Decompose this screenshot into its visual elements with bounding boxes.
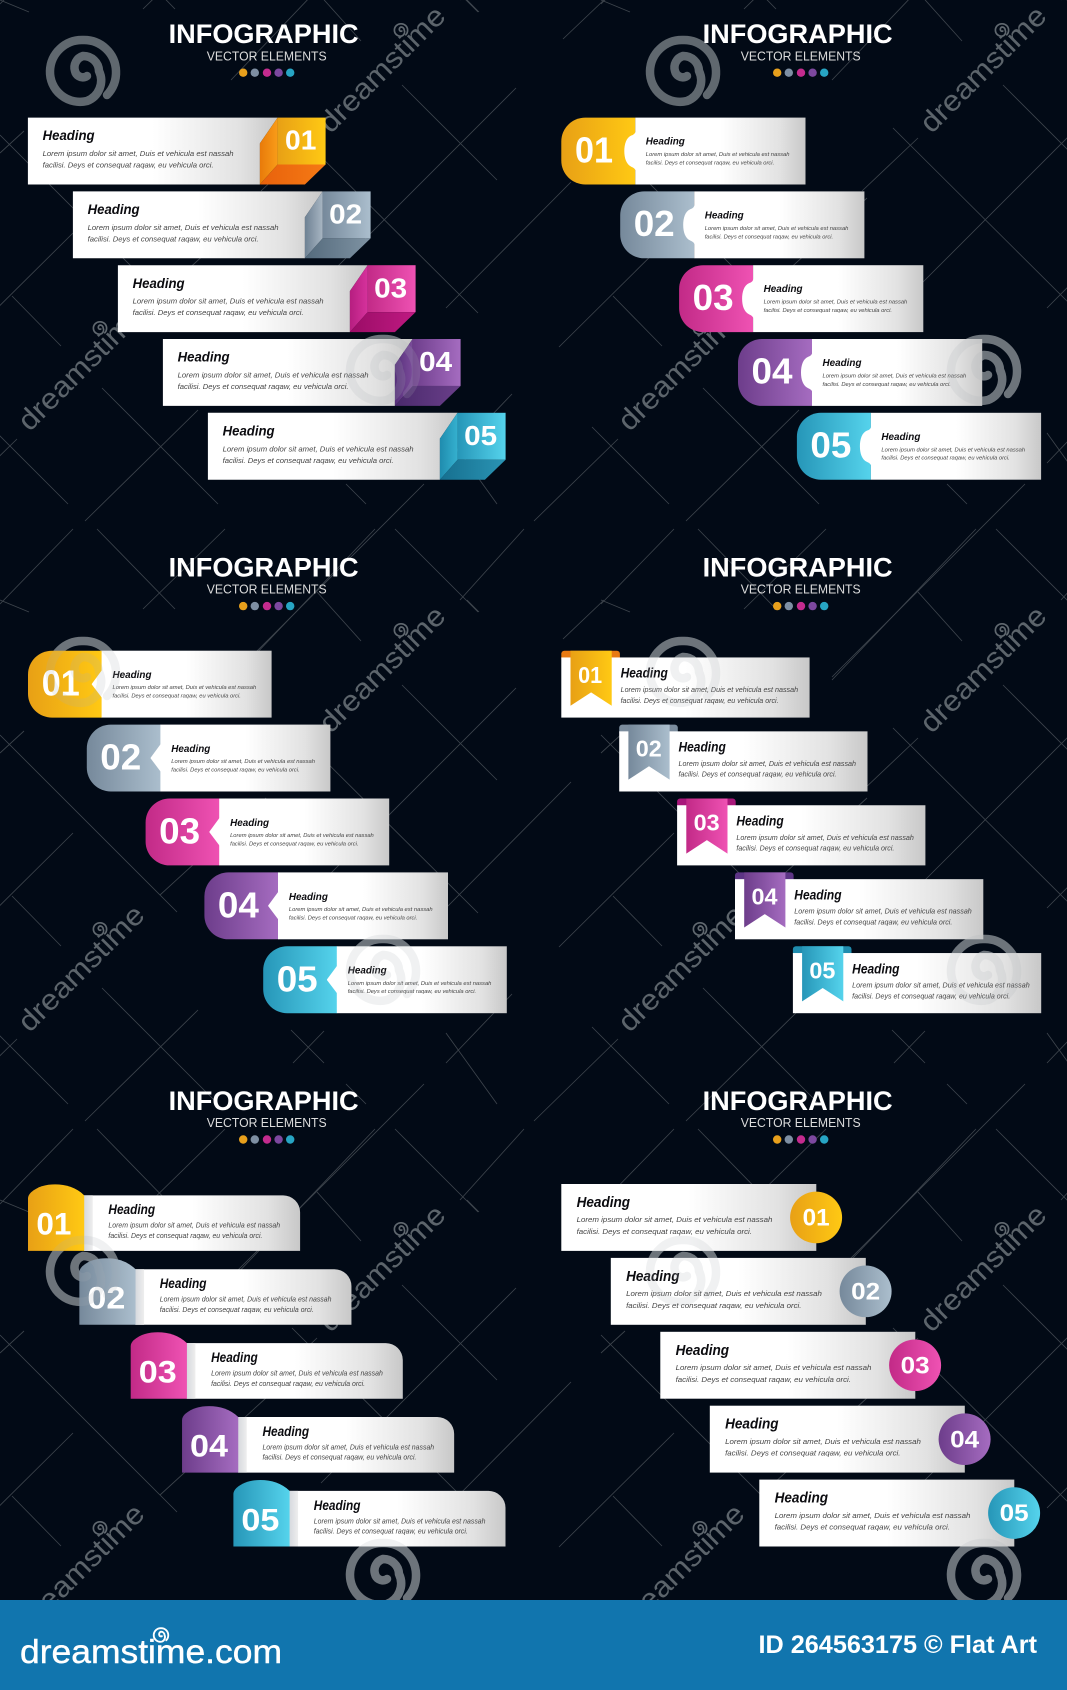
card 05 [263, 946, 507, 1013]
card 05: Heading [348, 966, 387, 977]
card 05 [793, 946, 1041, 1013]
card 01: 01 [803, 1205, 830, 1232]
card 05: facilisi. Deys et consequat raqaw, eu vehicula orci. [223, 456, 394, 465]
card 01: Heading [646, 137, 685, 148]
card 05: 05 [810, 426, 851, 465]
card 01: 01 [42, 664, 80, 704]
title: VECTOR ELEMENTS [741, 1115, 861, 1130]
panel 4: bookmark labels [561, 552, 1041, 1013]
card 01: facilisi. Deys et consequat raqaw, eu vehicula orci. [621, 698, 779, 705]
card 04 [738, 339, 982, 406]
card 01: 01 [578, 662, 602, 688]
card 05: Heading [223, 422, 275, 438]
card 05 [208, 413, 506, 480]
card 05: 05 [241, 1501, 279, 1537]
card 03 [679, 265, 923, 332]
card 02: facilisi. Deys et consequat raqaw, eu vehicula orci. [88, 234, 259, 243]
card 03: Heading [764, 284, 803, 295]
card 05: Heading [775, 1491, 828, 1507]
title: INFOGRAPHIC [169, 19, 359, 49]
watermark layer: dreamstime [313, 0, 452, 139]
watermark layer: dreamstime [313, 1199, 452, 1338]
card 02: Lorem ipsum dolor sit amet, Duis et vehicula est nassah [705, 226, 848, 232]
card 05: Heading [852, 961, 900, 976]
card 01: Lorem ipsum dolor sit amet, Duis et vehicula est nassah [108, 1223, 280, 1230]
card 03 [677, 798, 925, 865]
card 02: 02 [329, 199, 362, 230]
card 03 [131, 1332, 403, 1399]
card 04: Lorem ipsum dolor sit amet, Duis et vehicula est nassah [178, 371, 369, 380]
title: VECTOR ELEMENTS [207, 582, 327, 597]
card 03: 03 [159, 812, 200, 851]
card 02: Lorem ipsum dolor sit amet, Duis et vehicula est nassah [626, 1289, 822, 1298]
card 02: 02 [87, 1280, 125, 1316]
card 01 [28, 118, 326, 184]
card 01: facilisi. Deys et consequat raqaw, eu vehicula orci. [43, 161, 214, 170]
card 03: Heading [133, 275, 185, 291]
card 02: facilisi. Deys et consequat raqaw, eu vehicula orci. [160, 1307, 314, 1314]
watermark layer: dreamstime [914, 1199, 1053, 1338]
card 04: Lorem ipsum dolor sit amet, Duis et vehicula est nassah [794, 909, 972, 916]
card 04: 04 [950, 1426, 980, 1453]
card 04: facilisi. Deys et consequat raqaw, eu vehicula orci. [178, 382, 349, 391]
card 01: Lorem ipsum dolor sit amet, Duis et vehicula est nassah [577, 1215, 772, 1224]
card 04: Lorem ipsum dolor sit amet, Duis et vehicula est nassah [289, 907, 433, 913]
card 02: Heading [705, 210, 744, 221]
card 05: Heading [881, 432, 921, 443]
card 01 [28, 1184, 300, 1251]
card 05 [233, 1480, 506, 1546]
panel 2: rounded labels with round notch [561, 19, 1041, 480]
card 02 [619, 725, 868, 791]
card 04: 04 [419, 346, 453, 377]
card 03: facilisi. Deys et consequat raqaw, eu vehicula orci. [764, 308, 892, 314]
card 02: Lorem ipsum dolor sit amet, Duis et vehicula est nassah [171, 759, 315, 765]
card 02: Heading [160, 1276, 206, 1291]
card 03: Heading [211, 1350, 258, 1365]
card 03: facilisi. Deys et consequat raqaw, eu vehicula orci. [676, 1375, 851, 1384]
card 04: facilisi. Deys et consequat raqaw, eu vehicula orci. [794, 920, 952, 926]
card 01: Heading [108, 1202, 155, 1217]
card 03: Heading [736, 814, 784, 828]
card 04 [204, 872, 448, 939]
card 04 [710, 1406, 991, 1473]
card 05: facilisi. Deys et consequat raqaw, eu vehicula orci. [314, 1529, 468, 1536]
footer bar [0, 1600, 1067, 1690]
card 03 [146, 798, 389, 865]
title [169, 19, 359, 77]
card 01: facilisi. Deys et consequat raqaw, eu vehicula orci. [108, 1233, 262, 1240]
title: INFOGRAPHIC [703, 19, 893, 49]
card 05 [759, 1480, 1040, 1546]
card 04 [735, 872, 983, 939]
title: VECTOR ELEMENTS [207, 48, 327, 63]
watermark layer: dreamstime [313, 600, 452, 739]
watermark layer: dreamstime [12, 899, 151, 1038]
card 05: Lorem ipsum dolor sit amet, Duis et vehicula est nassah [775, 1511, 970, 1520]
card 04: Lorem ipsum dolor sit amet, Duis et vehicula est nassah [262, 1444, 434, 1451]
card 05: facilisi. Deys et consequat raqaw, eu vehicula orci. [348, 989, 476, 995]
card 01 [28, 651, 272, 718]
panel 5: domed tab labels [28, 1086, 506, 1546]
card 05: 05 [464, 420, 497, 451]
card 02: Heading [88, 201, 140, 217]
card 04: Heading [725, 1417, 779, 1433]
card 03: Lorem ipsum dolor sit amet, Duis et vehicula est nassah [230, 833, 374, 839]
card 03: Heading [230, 818, 270, 829]
card 01: Heading [112, 670, 152, 681]
title [703, 552, 893, 610]
title: INFOGRAPHIC [703, 1086, 893, 1116]
card 05: facilisi. Deys et consequat raqaw, eu vehicula orci. [775, 1523, 950, 1532]
watermark layer: dreamstime [612, 298, 751, 437]
card 04: Lorem ipsum dolor sit amet, Duis et vehicula est nassah [822, 374, 966, 380]
card 02 [79, 1258, 351, 1325]
watermark layer: dreamstime [612, 1498, 751, 1637]
card 03: Lorem ipsum dolor sit amet, Duis et vehicula est nassah [676, 1363, 871, 1372]
card 01 [561, 1184, 842, 1251]
card 02: Lorem ipsum dolor sit amet, Duis et vehicula est nassah [160, 1297, 332, 1304]
title: INFOGRAPHIC [169, 1086, 359, 1116]
card 04: 04 [751, 884, 778, 910]
panel 1: cube labels [28, 19, 506, 480]
card 04: 04 [218, 885, 259, 925]
title [169, 1086, 359, 1144]
watermark overlay on cards [50, 339, 1017, 1605]
card 01 [561, 651, 810, 718]
card 01: Lorem ipsum dolor sit amet, Duis et vehicula est nassah [621, 687, 798, 694]
card 03: 03 [901, 1352, 930, 1379]
card 05: 05 [809, 958, 836, 983]
card 04: facilisi. Deys et consequat raqaw, eu vehicula orci. [262, 1455, 417, 1462]
card 01: 01 [575, 130, 613, 170]
card 01: Lorem ipsum dolor sit amet, Duis et vehicula est nassah [43, 149, 234, 158]
panel 6: circle number labels [561, 1086, 1040, 1546]
card 01: Heading [43, 127, 95, 143]
card 05: Lorem ipsum dolor sit amet, Duis et vehicula est nassah [881, 447, 1025, 453]
card 01: facilisi. Deys et consequat raqaw, eu vehicula orci. [577, 1227, 752, 1236]
watermark layer: dreamstime [914, 600, 1053, 739]
card 03: facilisi. Deys et consequat raqaw, eu vehicula orci. [230, 841, 358, 847]
title: INFOGRAPHIC [703, 552, 893, 582]
card 01: 01 [36, 1206, 71, 1242]
card 02: Heading [626, 1269, 680, 1285]
card 03: 03 [693, 278, 734, 318]
card 03: Lorem ipsum dolor sit amet, Duis et vehicula est nassah [764, 300, 907, 306]
card 01 [561, 118, 806, 184]
title: VECTOR ELEMENTS [207, 1115, 327, 1130]
card 03 [660, 1332, 941, 1399]
image id and credit: ID 264563175 © Flat Art [758, 1631, 1038, 1659]
card 02 [87, 725, 330, 791]
footer logo: dreamstime.com [20, 1633, 282, 1670]
card 03: 03 [139, 1354, 177, 1389]
title: VECTOR ELEMENTS [741, 582, 861, 597]
card 02: 02 [100, 738, 141, 778]
card 04 [163, 339, 461, 406]
card 02 [611, 1258, 892, 1325]
card 01: Lorem ipsum dolor sit amet, Duis et vehicula est nassah [112, 685, 256, 691]
title: VECTOR ELEMENTS [741, 48, 861, 63]
card 03: Lorem ipsum dolor sit amet, Duis et vehicula est nassah [133, 297, 324, 306]
card 03: facilisi. Deys et consequat raqaw, eu vehicula orci. [736, 846, 894, 853]
card 05: 05 [1000, 1500, 1029, 1527]
card 02: Lorem ipsum dolor sit amet, Duis et vehicula est nassah [88, 223, 279, 232]
title [703, 1086, 893, 1144]
card 04: facilisi. Deys et consequat raqaw, eu vehicula orci. [822, 382, 951, 388]
card 01: Heading [577, 1195, 630, 1211]
card 05: Heading [314, 1498, 360, 1513]
card 04: Lorem ipsum dolor sit amet, Duis et vehicula est nassah [725, 1437, 921, 1446]
card 02: 02 [636, 736, 662, 762]
title: INFOGRAPHIC [169, 552, 359, 582]
card 01: Lorem ipsum dolor sit amet, Duis et vehicula est nassah [646, 152, 789, 158]
card 01: Heading [621, 666, 668, 681]
title [703, 19, 893, 77]
watermark layer: dreamstime [914, 0, 1053, 139]
card 05: Lorem ipsum dolor sit amet, Duis et vehicula est nassah [314, 1518, 486, 1525]
card 03: Lorem ipsum dolor sit amet, Duis et vehicula est nassah [211, 1370, 383, 1377]
card 02: facilisi. Deys et consequat raqaw, eu vehicula orci. [171, 768, 300, 774]
card 02: 02 [634, 204, 675, 244]
card 01: facilisi. Deys et consequat raqaw, eu vehicula orci. [112, 694, 241, 700]
card 02 [73, 191, 371, 258]
card 05: facilisi. Deys et consequat raqaw, eu vehicula orci. [881, 456, 1010, 462]
card 03: facilisi. Deys et consequat raqaw, eu vehicula orci. [211, 1381, 365, 1388]
card 04: facilisi. Deys et consequat raqaw, eu vehicula orci. [289, 915, 417, 921]
card 04: facilisi. Deys et consequat raqaw, eu vehicula orci. [725, 1449, 900, 1458]
card 03: Heading [676, 1343, 729, 1359]
card 03: 03 [694, 810, 720, 836]
card 04: Heading [794, 887, 842, 902]
watermark layer: dreamstime [612, 899, 751, 1038]
card 02 [620, 191, 864, 258]
card 02: facilisi. Deys et consequat raqaw, eu vehicula orci. [679, 772, 837, 779]
watermark layer: dreamstime [12, 298, 151, 437]
card 02: facilisi. Deys et consequat raqaw, eu vehicula orci. [705, 234, 833, 240]
card 04: 04 [190, 1428, 228, 1463]
card 02: 02 [851, 1279, 880, 1305]
card 03: facilisi. Deys et consequat raqaw, eu vehicula orci. [133, 308, 304, 317]
card 03 [118, 265, 416, 332]
card 03: Lorem ipsum dolor sit amet, Duis et vehicula est nassah [736, 835, 914, 842]
card 05: facilisi. Deys et consequat raqaw, eu vehicula orci. [852, 993, 1010, 1000]
card 04: Heading [822, 358, 862, 369]
card 04: Heading [262, 1424, 309, 1439]
card 02: Heading [171, 744, 211, 755]
card 04: Heading [289, 892, 328, 903]
card 01: facilisi. Deys et consequat raqaw, eu vehicula orci. [646, 161, 774, 167]
card 03: 03 [374, 272, 407, 303]
card 02: facilisi. Deys et consequat raqaw, eu vehicula orci. [626, 1301, 801, 1310]
card 02: Lorem ipsum dolor sit amet, Duis et vehicula est nassah [679, 761, 856, 768]
panel 3: rounded labels with arrow notch [28, 552, 507, 1013]
card 04: 04 [752, 352, 793, 392]
card 04: Heading [178, 349, 230, 365]
card 01: 01 [285, 125, 316, 156]
watermark layer: dreamstime [12, 1498, 151, 1637]
card 05: Lorem ipsum dolor sit amet, Duis et vehicula est nassah [852, 983, 1030, 990]
title [169, 552, 359, 610]
card 05: 05 [277, 959, 318, 999]
card 05: Lorem ipsum dolor sit amet, Duis et vehicula est nassah [348, 981, 491, 987]
card 04 [182, 1406, 454, 1473]
card 02: Heading [679, 740, 726, 755]
card 05: Lorem ipsum dolor sit amet, Duis et vehicula est nassah [223, 444, 414, 453]
card 05 [797, 413, 1041, 480]
